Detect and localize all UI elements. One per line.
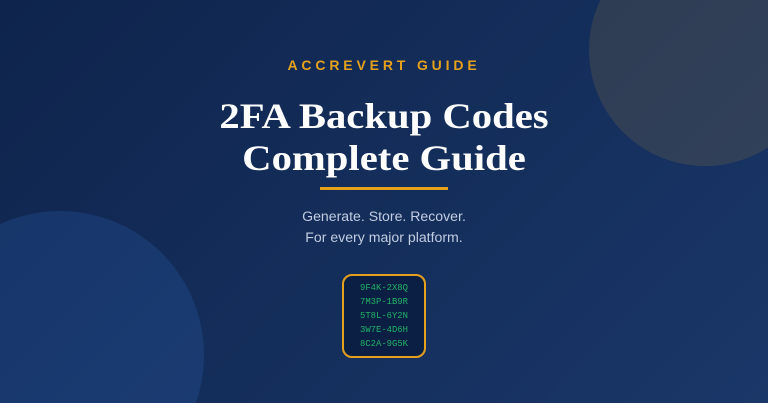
subtitle bbox=[302, 208, 466, 245]
backup codes list: 7M3P-1B9R bbox=[360, 297, 408, 307]
decorative circle: bottom left bbox=[0, 211, 204, 403]
accent divider bbox=[320, 187, 448, 190]
backup codes list bbox=[360, 283, 408, 349]
backup codes list: 5T8L-6Y2N bbox=[360, 311, 408, 321]
eyebrow label: ACCREVERT GUIDE bbox=[287, 57, 481, 73]
backup codes list: 8C2A-9G5K bbox=[360, 339, 408, 349]
title bbox=[219, 96, 549, 178]
title: Complete Guide bbox=[242, 138, 526, 178]
decorative circle: top right bbox=[589, 0, 768, 166]
subtitle: Generate. Store. Recover. bbox=[302, 208, 466, 224]
backup codes card bbox=[342, 274, 426, 358]
title: 2FA Backup Codes bbox=[219, 96, 549, 136]
backup codes list: 9F4K-2X8Q bbox=[360, 283, 408, 293]
backup codes list: 3W7E-4D6H bbox=[360, 325, 408, 335]
subtitle: For every major platform. bbox=[305, 229, 463, 245]
